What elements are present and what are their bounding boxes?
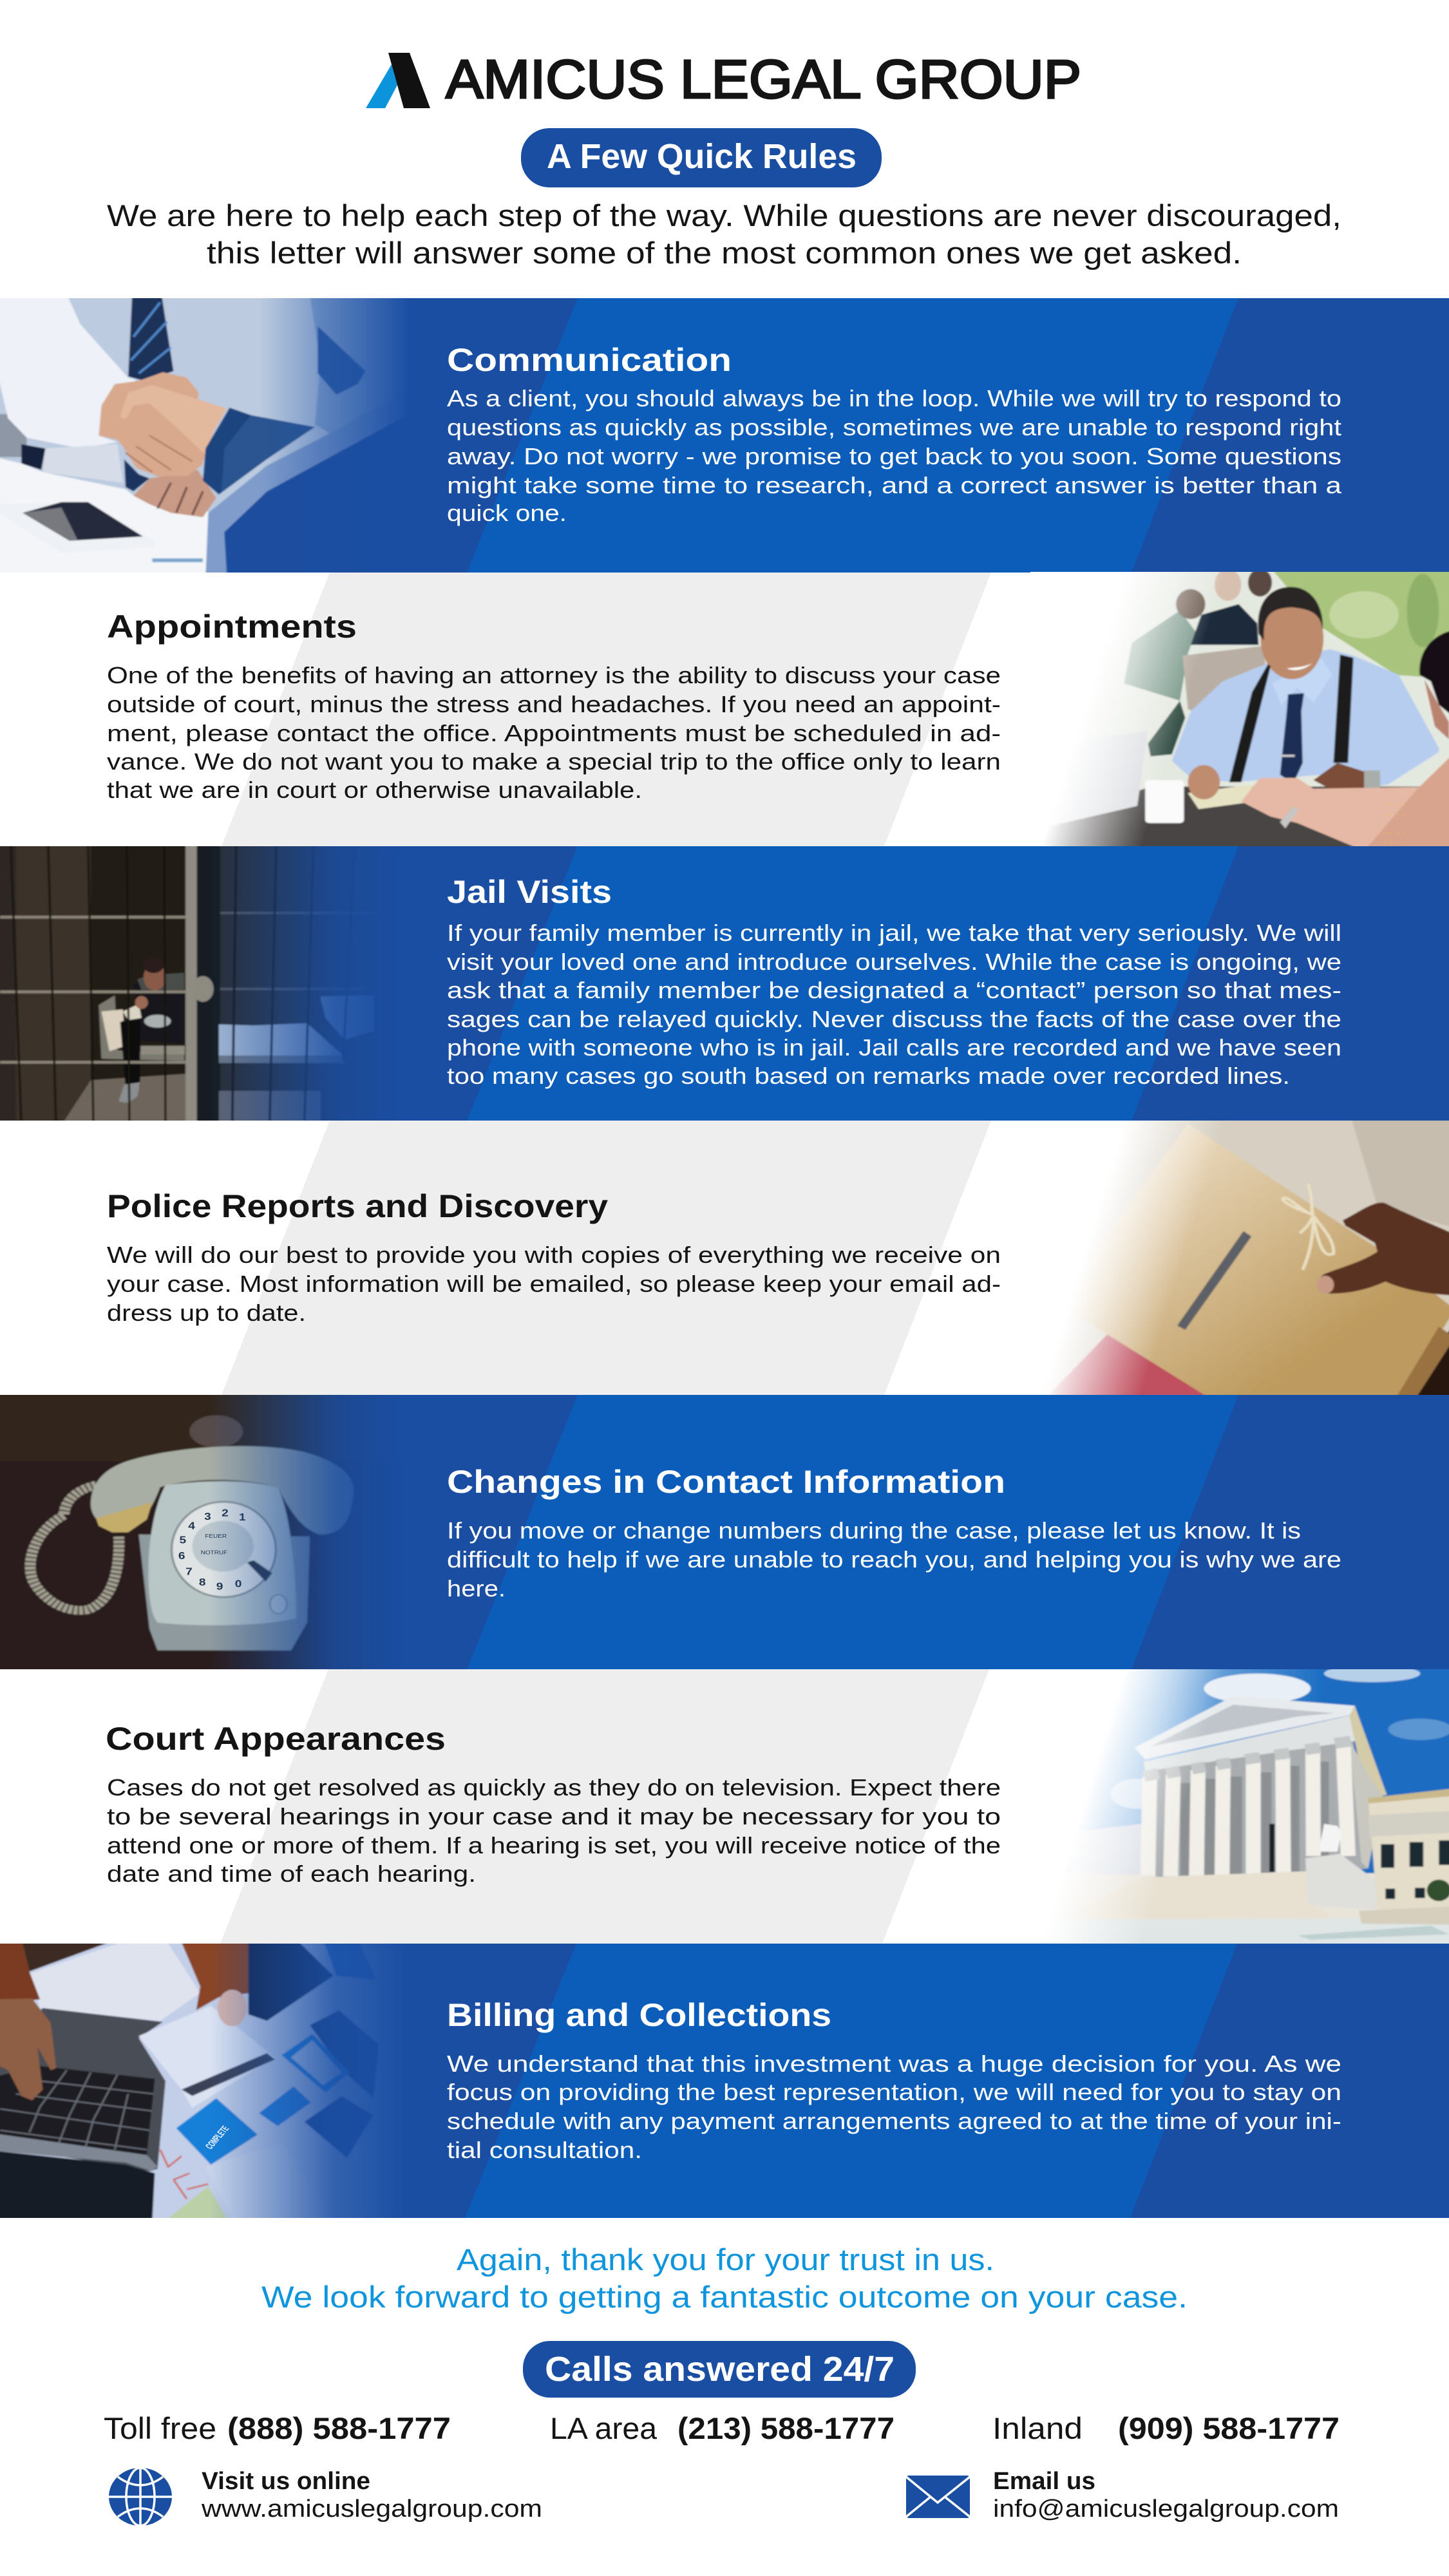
dial numbers: FEUER <box>205 1533 227 1539</box>
body text <box>447 920 1341 1089</box>
panel: jail visits <box>0 842 1449 1125</box>
icon: logo mark <box>366 53 430 108</box>
company name: AMICUS LEGAL GROUP <box>446 49 1081 109</box>
panel: billing and collections <box>0 1939 1449 2222</box>
photo: laptop and calculator <box>0 1944 384 2218</box>
phone number: inland <box>992 2411 1340 2445</box>
heading: Jail Visits <box>447 874 612 910</box>
body text: ask that a family member be designated a “contact” person so that mes- <box>447 977 1341 1003</box>
body text: If your family member is currently in jail, we take that very seriously. We will <box>447 920 1341 946</box>
body text: ment, please contact the office. Appointments must be scheduled in ad- <box>107 720 1001 746</box>
dial numbers: 9 <box>216 1580 223 1592</box>
body text: tial consultation. <box>447 2137 642 2163</box>
body text: dress up to date. <box>107 1300 306 1326</box>
photo: handshake <box>0 294 424 577</box>
body text: visit your loved one and introduce ourselves. While the case is ongoing, we <box>447 949 1341 975</box>
website contact <box>201 2468 542 2523</box>
calls answered pill <box>523 2341 916 2398</box>
closing thank-you message <box>261 2242 1188 2314</box>
phone number: toll free <box>104 2411 451 2445</box>
body text: date and time of each hearing. <box>107 1861 476 1887</box>
body text: Cases do not get resolved as quickly as they do on television. Expect there <box>107 1774 1001 1801</box>
dial numbers <box>178 1507 246 1592</box>
panel: court appearances <box>107 1669 1449 1944</box>
email contact: info@amicuslegalgroup.com <box>993 2496 1339 2523</box>
photo: supreme court building <box>1068 1669 1449 1944</box>
body text: outside of court, minus the stress and headaches. If you need an appoint- <box>107 691 1001 717</box>
body text <box>447 1517 1341 1602</box>
closing thank-you message: We look forward to getting a fantastic outcome on your case. <box>261 2280 1188 2314</box>
dial numbers: 1 <box>239 1511 246 1523</box>
body text: too many cases go south based on remarks made over recorded lines. <box>447 1063 1290 1089</box>
heading: Billing and Collections <box>447 1997 831 2033</box>
photo: tied folder in hand <box>1025 1116 1449 1399</box>
dial numbers: 4 <box>188 1520 195 1531</box>
dial numbers: NOTRUF <box>201 1549 228 1555</box>
intro text <box>107 198 1341 270</box>
body text: your case. Most information will be emailed, so please keep your email ad- <box>107 1271 1001 1297</box>
heading: Police Reports and Discovery <box>107 1188 608 1224</box>
title pill <box>521 128 882 187</box>
body text <box>447 2050 1341 2163</box>
body text: focus on providing the best representation, we will need for you to stay on <box>447 2079 1341 2105</box>
icon: envelope <box>906 2476 970 2518</box>
body text: might take some time to research, and a correct answer is better than a <box>447 472 1342 498</box>
dial numbers: 6 <box>178 1550 185 1562</box>
body text: quick one. <box>447 500 567 526</box>
phone number: inland: Inland <box>992 2411 1083 2445</box>
body text: that we are in court or otherwise unavailable. <box>107 777 642 803</box>
body text: We will do our best to provide you with copies of everything we receive on <box>107 1242 1001 1268</box>
title pill: A Few Quick Rules <box>547 137 857 176</box>
email contact <box>993 2468 1339 2523</box>
body text: As a client, you should always be in the loop. While we will try to respond to <box>447 385 1341 412</box>
heading: Changes in Contact Information <box>447 1464 1005 1500</box>
body text <box>447 385 1342 526</box>
icon: globe <box>109 2468 172 2526</box>
dial numbers: 5 <box>180 1534 187 1546</box>
phone number: LA area: LA area <box>550 2411 658 2445</box>
heading: Appointments <box>107 609 357 645</box>
body text <box>107 662 1001 803</box>
body text: questions as quickly as possible, sometimes we are unable to respond right <box>447 414 1341 440</box>
dial numbers: 0 <box>235 1578 242 1589</box>
phone number: toll free: Toll free <box>104 2411 216 2445</box>
panel: communication <box>0 294 1449 577</box>
dial numbers: 7 <box>185 1566 193 1577</box>
body text: sages can be relayed quickly. Never discuss the facts of the case over the <box>447 1006 1341 1032</box>
body text: If you move or change numbers during the case, please let us know. It is <box>447 1517 1301 1544</box>
body text: vance. We do not want you to make a special trip to the office only to learn <box>107 748 1001 775</box>
heading: Communication <box>447 342 732 378</box>
phone number: toll free: (888) 588-1777 <box>227 2411 451 2445</box>
phone number: inland: (909) 588-1777 <box>1118 2411 1340 2445</box>
email contact: Email us <box>993 2468 1095 2495</box>
body text: difficult to help if we are unable to reach you, and helping you is why we are <box>447 1546 1341 1573</box>
body text: phone with someone who is in jail. Jail calls are recorded and we have seen <box>447 1034 1341 1061</box>
closing thank-you message: Again, thank you for your trust in us. <box>457 2242 994 2277</box>
dial numbers: 3 <box>204 1511 211 1522</box>
intro text: We are here to help each step of the way. While questions are never discouraged, <box>107 198 1341 232</box>
panel: changes in contact information <box>0 1390 1449 1674</box>
panel: appointments <box>107 572 1449 846</box>
document label: COMPLETE <box>204 2125 232 2151</box>
panel: police reports and discovery <box>107 1121 1449 1395</box>
calls answered pill: Calls answered 24/7 <box>545 2350 895 2389</box>
body text: here. <box>447 1575 506 1602</box>
body text <box>107 1242 1001 1326</box>
body text: to be several hearings in your case and it may be necessary for you to <box>107 1803 1001 1830</box>
body text: schedule with any payment arrangements agreed to at the time of your ini- <box>447 2108 1341 2134</box>
website contact: www.amicuslegalgroup.com <box>201 2496 542 2523</box>
photo: attorney at table <box>1025 567 1449 851</box>
intro text: this letter will answer some of the most common ones we get asked. <box>207 236 1242 270</box>
heading: Court Appearances <box>106 1721 446 1757</box>
body text: away. Do not worry - we promise to get back to you soon. Some questions <box>447 443 1341 469</box>
body text: One of the benefits of having an attorney is the ability to discuss your case <box>107 662 1001 688</box>
body text <box>107 1774 1001 1887</box>
photo: rotary telephone <box>0 1395 378 1669</box>
phone number: LA area <box>550 2411 895 2445</box>
logo and company name <box>366 49 1081 109</box>
photo: jail cell <box>0 846 372 1121</box>
dial numbers: 2 <box>222 1507 229 1519</box>
body text: attend one or more of them. If a hearing is set, you will receive notice of the <box>107 1832 1001 1859</box>
phone number: LA area: (213) 588-1777 <box>677 2411 895 2445</box>
dial numbers: 8 <box>199 1577 206 1588</box>
website contact: Visit us online <box>202 2468 370 2495</box>
body text: We understand that this investment was a huge decision for you. As we <box>447 2050 1341 2077</box>
